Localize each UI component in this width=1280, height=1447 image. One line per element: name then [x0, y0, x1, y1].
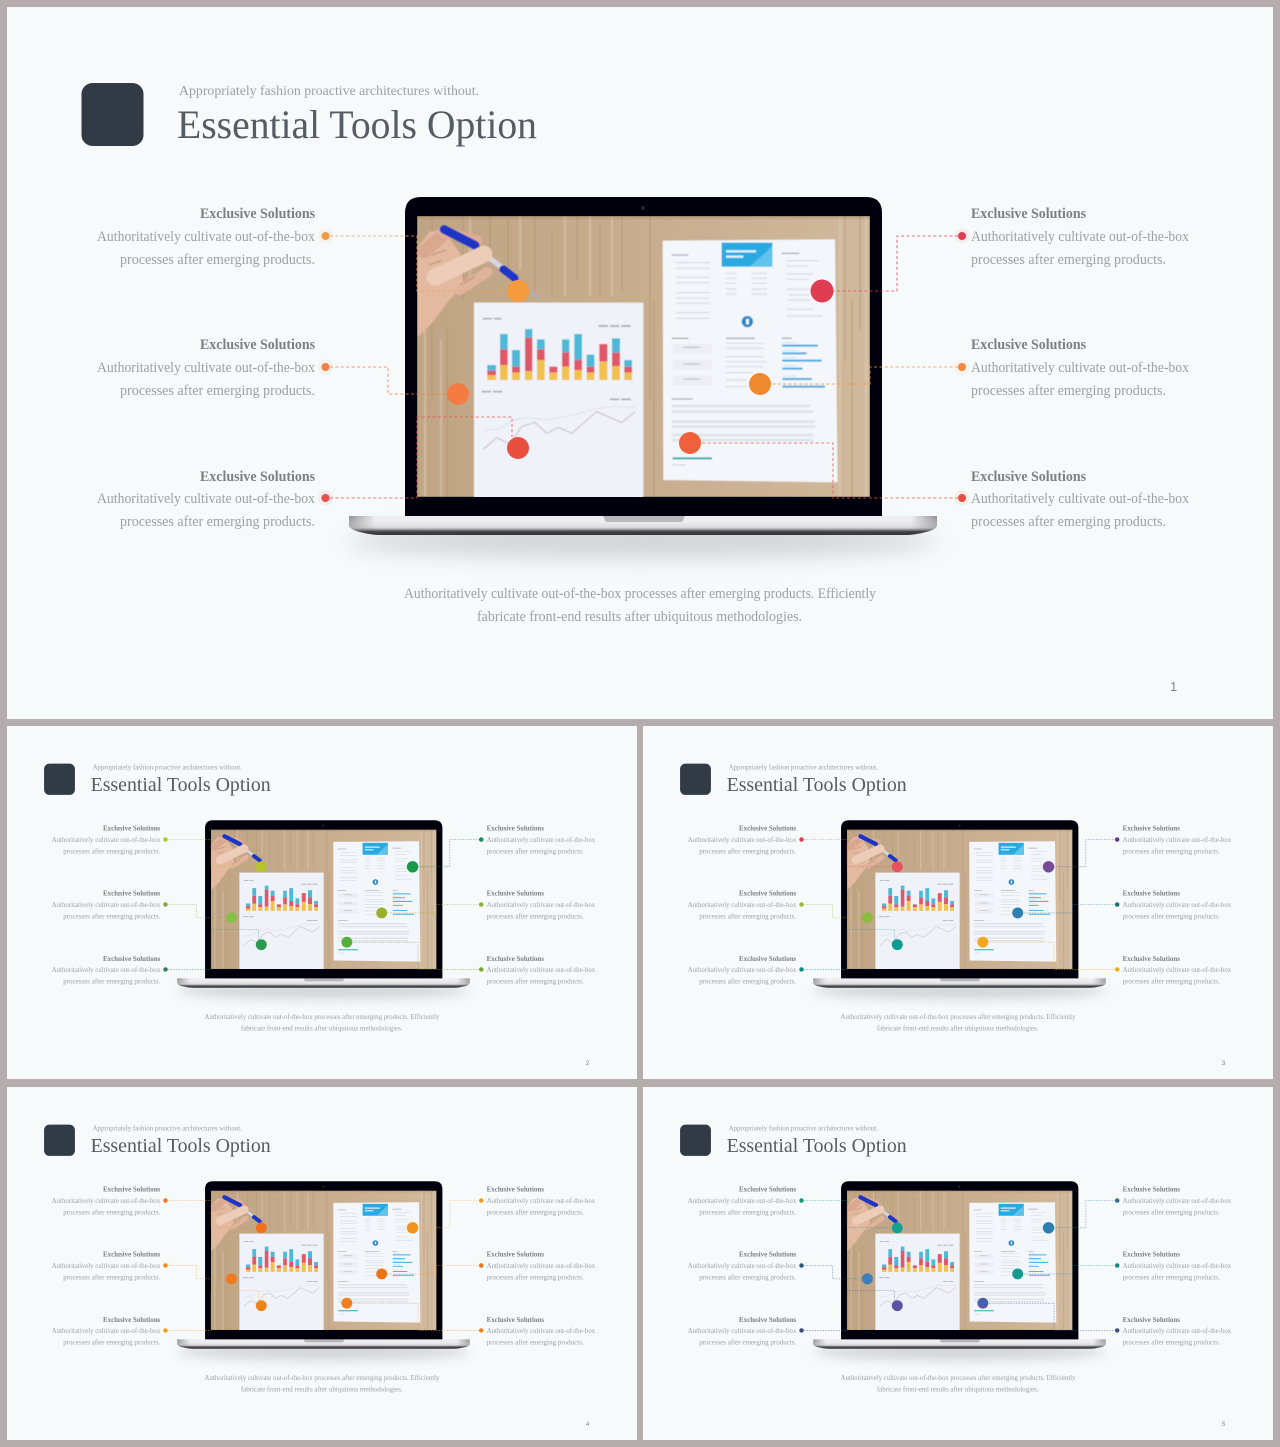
page number: 5 [1222, 1421, 1226, 1428]
panel: slide background [643, 1087, 1273, 1440]
title: Essential Tools Option [91, 774, 271, 796]
left text block 2: Exclusive Solutions [103, 1251, 160, 1259]
laptop with photo [813, 1181, 1106, 1360]
bottom caption [205, 1374, 440, 1393]
right text block 3: Exclusive Solutions [1123, 1316, 1180, 1324]
left text block 1 [52, 1186, 168, 1216]
laptop with photo [813, 820, 1106, 999]
left text block 2: processes after emerging products. [699, 1273, 796, 1281]
right text block 2 [479, 1251, 596, 1281]
connector lines [804, 1201, 1116, 1330]
right text block 3 [1115, 1316, 1232, 1346]
left text block 3 [688, 955, 804, 985]
left text block 2: processes after emerging products. [120, 383, 315, 399]
right text block 3: Exclusive Solutions [487, 1316, 544, 1324]
right text block 2: Exclusive Solutions [487, 1251, 544, 1259]
bottom caption [404, 586, 877, 625]
slide 5: blue and teal variant [643, 1087, 1273, 1440]
bottom caption: Authoritatively cultivate out-of-the-box processes after emerging products. Efficiently [841, 1374, 1076, 1382]
right text block 1: Authoritatively cultivate out-of-the-box [971, 229, 1190, 245]
page number: 1 [1170, 679, 1177, 694]
left text block 3 [52, 1316, 168, 1346]
right text block 1 [479, 1186, 596, 1216]
left text block 2 [52, 1251, 168, 1281]
left text block 1: Exclusive Solutions [200, 206, 315, 222]
left text block 1 [52, 825, 168, 855]
left text block 3: Exclusive Solutions [103, 955, 160, 963]
connector lines [168, 1201, 480, 1330]
right text block 2: processes after emerging products. [487, 1273, 584, 1281]
left text block 1: Exclusive Solutions [103, 1186, 160, 1194]
right text block 3: Authoritatively cultivate out-of-the-box [487, 966, 596, 974]
subtitle: Appropriately fashion proactive architectures without. [179, 84, 479, 99]
right text block 2: Exclusive Solutions [971, 337, 1086, 353]
right text block 1: Authoritatively cultivate out-of-the-box [1123, 836, 1232, 844]
left text block 2: Authoritatively cultivate out-of-the-box [688, 901, 797, 909]
right text block 2 [1115, 1251, 1232, 1281]
icon: dark rounded square [44, 764, 75, 795]
left text block 3: processes after emerging products. [699, 1338, 796, 1346]
panel: slide background [643, 726, 1273, 1079]
right text block 3: processes after emerging products. [487, 1338, 584, 1346]
right text block 3: Authoritatively cultivate out-of-the-box [487, 1327, 596, 1335]
connector lines [804, 840, 1116, 969]
icon: dark rounded square [44, 1125, 75, 1156]
title: Essential Tools Option [177, 102, 537, 147]
left text block 2: processes after emerging products. [63, 1273, 160, 1281]
left text block 2 [97, 337, 333, 399]
panel: slide background [7, 1087, 637, 1440]
bottom caption: Authoritatively cultivate out-of-the-box processes after emerging products. Efficiently [841, 1013, 1076, 1021]
right text block 3: processes after emerging products. [487, 977, 584, 985]
bottom caption: fabricate front-end results after ubiquitous methodologies. [877, 1385, 1039, 1393]
icon: dark rounded square [680, 764, 711, 795]
connector lines [168, 840, 480, 969]
page number: 2 [586, 1060, 590, 1067]
left text block 3: Exclusive Solutions [739, 1316, 796, 1324]
right text block 2: Authoritatively cultivate out-of-the-box [971, 360, 1190, 376]
right text block 2: Authoritatively cultivate out-of-the-box [487, 901, 596, 909]
left text block 1 [688, 1186, 804, 1216]
title: Essential Tools Option [91, 1135, 271, 1157]
left text block 2: Exclusive Solutions [739, 890, 796, 898]
left text block 3: Authoritatively cultivate out-of-the-box [688, 1327, 797, 1335]
title: Essential Tools Option [727, 1135, 907, 1157]
right text block 2: Authoritatively cultivate out-of-the-box [1123, 1262, 1232, 1270]
right text block 1 [954, 206, 1190, 268]
right text block 3: Exclusive Solutions [487, 955, 544, 963]
left text block 3: Authoritatively cultivate out-of-the-box [52, 966, 161, 974]
left text block 3 [688, 1316, 804, 1346]
left text block 3: Authoritatively cultivate out-of-the-box [97, 491, 316, 507]
laptop with photo [177, 820, 470, 999]
right text block 1: Exclusive Solutions [971, 206, 1086, 222]
right text block 3: Authoritatively cultivate out-of-the-box [971, 491, 1190, 507]
bottom caption [205, 1013, 440, 1032]
bottom caption: Authoritatively cultivate out-of-the-box processes after emerging products. Efficiently [404, 586, 877, 602]
left text block 3: processes after emerging products. [120, 514, 315, 530]
right text block 2: processes after emerging products. [971, 383, 1166, 399]
slide 4: orange variant [7, 1087, 637, 1440]
left text block 1: Exclusive Solutions [739, 1186, 796, 1194]
left text block 1: Authoritatively cultivate out-of-the-box [688, 1197, 797, 1205]
right text block 2: Exclusive Solutions [1123, 1251, 1180, 1259]
left text block 1: Authoritatively cultivate out-of-the-box [97, 229, 316, 245]
slide 2: green variant [7, 726, 637, 1079]
hotspot markers [226, 1222, 418, 1311]
right text block 3: Exclusive Solutions [971, 469, 1086, 485]
panel: slide background [7, 7, 1273, 719]
laptop with photo [348, 197, 938, 558]
left text block 1 [97, 206, 333, 268]
left text block 2: Authoritatively cultivate out-of-the-box [52, 901, 161, 909]
laptop with photo [177, 1181, 470, 1360]
right text block 2: Authoritatively cultivate out-of-the-box [487, 1262, 596, 1270]
hotspot markers [226, 861, 418, 950]
right text block 2 [1115, 890, 1232, 920]
right text block 2 [954, 337, 1190, 399]
page number: 3 [1222, 1060, 1226, 1067]
right text block 3: processes after emerging products. [1123, 977, 1220, 985]
left text block 1: processes after emerging products. [120, 252, 315, 268]
right text block 2: Authoritatively cultivate out-of-the-box [1123, 901, 1232, 909]
right text block 1: Exclusive Solutions [487, 1186, 544, 1194]
slide 3: mixed colour variant [643, 726, 1273, 1079]
left text block 1: Exclusive Solutions [103, 825, 160, 833]
right text block 1 [479, 825, 596, 855]
right text block 3 [1115, 955, 1232, 985]
right text block 1: processes after emerging products. [487, 847, 584, 855]
right text block 1: processes after emerging products. [1123, 1208, 1220, 1216]
bottom caption [841, 1013, 1076, 1032]
right text block 2: processes after emerging products. [1123, 912, 1220, 920]
right text block 2: Exclusive Solutions [487, 890, 544, 898]
left text block 2: Exclusive Solutions [103, 890, 160, 898]
subtitle: Appropriately fashion proactive architectures without. [93, 1125, 242, 1133]
right text block 2: processes after emerging products. [1123, 1273, 1220, 1281]
left text block 2: Authoritatively cultivate out-of-the-box [688, 1262, 797, 1270]
left text block 2: Exclusive Solutions [200, 337, 315, 353]
right text block 1: processes after emerging products. [971, 252, 1166, 268]
right text block 1: Exclusive Solutions [1123, 1186, 1180, 1194]
left text block 3: processes after emerging products. [63, 977, 160, 985]
left text block 3: processes after emerging products. [699, 977, 796, 985]
bottom caption: Authoritatively cultivate out-of-the-box processes after emerging products. Efficiently [205, 1013, 440, 1021]
panel: slide background [7, 726, 637, 1079]
hotspot markers [862, 861, 1054, 950]
right text block 3: Exclusive Solutions [1123, 955, 1180, 963]
right text block 2 [479, 890, 596, 920]
right text block 3 [479, 955, 596, 985]
bottom caption: fabricate front-end results after ubiquitous methodologies. [241, 1024, 403, 1032]
left text block 3: Exclusive Solutions [103, 1316, 160, 1324]
left text block 2: processes after emerging products. [699, 912, 796, 920]
left text block 3: Authoritatively cultivate out-of-the-box [688, 966, 797, 974]
right text block 1: Authoritatively cultivate out-of-the-box [487, 1197, 596, 1205]
left text block 2 [688, 1251, 804, 1281]
right text block 1: Exclusive Solutions [487, 825, 544, 833]
left text block 1: Authoritatively cultivate out-of-the-box [52, 1197, 161, 1205]
slide 1: large slide [7, 7, 1273, 719]
left text block 1: Exclusive Solutions [739, 825, 796, 833]
left text block 3: Exclusive Solutions [739, 955, 796, 963]
left text block 1: processes after emerging products. [63, 847, 160, 855]
right text block 1 [1115, 825, 1232, 855]
bottom caption: fabricate front-end results after ubiquitous methodologies. [877, 1024, 1039, 1032]
right text block 1: processes after emerging products. [1123, 847, 1220, 855]
right text block 3: Authoritatively cultivate out-of-the-box [1123, 1327, 1232, 1335]
right text block 3 [954, 469, 1190, 530]
right text block 3: processes after emerging products. [971, 514, 1166, 530]
icon: dark rounded square [82, 83, 144, 146]
hotspot markers [447, 280, 834, 459]
right text block 1: Authoritatively cultivate out-of-the-box [1123, 1197, 1232, 1205]
subtitle: Appropriately fashion proactive architectures without. [729, 764, 878, 772]
right text block 1: Authoritatively cultivate out-of-the-box [487, 836, 596, 844]
left text block 1: processes after emerging products. [699, 847, 796, 855]
left text block 3 [52, 955, 168, 985]
right text block 3: processes after emerging products. [1123, 1338, 1220, 1346]
left text block 1: Authoritatively cultivate out-of-the-box [688, 836, 797, 844]
left text block 1: Authoritatively cultivate out-of-the-box [52, 836, 161, 844]
right text block 1: Exclusive Solutions [1123, 825, 1180, 833]
left text block 2: Authoritatively cultivate out-of-the-box [52, 1262, 161, 1270]
left text block 3: processes after emerging products. [63, 1338, 160, 1346]
left text block 2 [52, 890, 168, 920]
connector lines [330, 236, 958, 498]
bottom caption [841, 1374, 1076, 1393]
icon: dark rounded square [680, 1125, 711, 1156]
left text block 3: Exclusive Solutions [200, 469, 315, 485]
left text block 2: Exclusive Solutions [739, 1251, 796, 1259]
title: Essential Tools Option [727, 774, 907, 796]
right text block 1: processes after emerging products. [487, 1208, 584, 1216]
left text block 2 [688, 890, 804, 920]
subtitle: Appropriately fashion proactive architectures without. [729, 1125, 878, 1133]
left text block 1 [688, 825, 804, 855]
page number: 4 [586, 1421, 590, 1428]
bottom caption: Authoritatively cultivate out-of-the-box processes after emerging products. Efficiently [205, 1374, 440, 1382]
left text block 2: Authoritatively cultivate out-of-the-box [97, 360, 316, 376]
bottom caption: fabricate front-end results after ubiquitous methodologies. [477, 609, 802, 625]
hotspot markers [862, 1222, 1054, 1311]
left text block 3: Authoritatively cultivate out-of-the-box [52, 1327, 161, 1335]
right text block 3 [479, 1316, 596, 1346]
left text block 1: processes after emerging products. [63, 1208, 160, 1216]
right text block 3: Authoritatively cultivate out-of-the-box [1123, 966, 1232, 974]
right text block 1 [1115, 1186, 1232, 1216]
bottom caption: fabricate front-end results after ubiquitous methodologies. [241, 1385, 403, 1393]
right text block 2: Exclusive Solutions [1123, 890, 1180, 898]
subtitle: Appropriately fashion proactive architectures without. [93, 764, 242, 772]
right text block 2: processes after emerging products. [487, 912, 584, 920]
left text block 1: processes after emerging products. [699, 1208, 796, 1216]
left text block 2: processes after emerging products. [63, 912, 160, 920]
left text block 3 [97, 469, 333, 530]
